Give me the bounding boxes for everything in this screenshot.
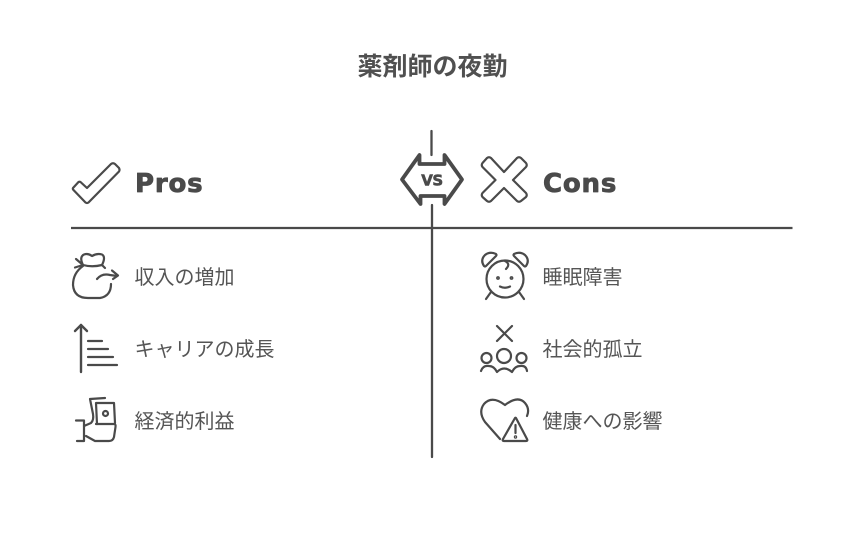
vertical divider [430,131,433,457]
label: economic benefit: 経済的利益 [134,410,234,433]
title: 薬剤師の夜勤 [357,53,508,81]
icon: money bag with arrow [73,254,118,298]
icon: heart with warning [481,399,528,441]
label: income: 収入の増加 [134,266,234,289]
label: social isolation: 社会的孤立 [542,338,642,361]
VS text: VS [421,172,443,190]
horizontal divider [71,227,792,229]
icon: hand holding money [76,398,116,441]
heading: Pros: Pros [135,169,203,199]
icon: VS badge [402,155,462,204]
icon: alarm clock face [482,253,528,299]
label: career growth: キャリアの成長 [134,338,274,361]
icon: check mark [73,163,120,203]
icon: cross mark [482,157,527,202]
heading: Cons: Cons [543,169,617,199]
icon: crossed people group [481,326,527,372]
label: health impact: 健康への影響 [542,410,662,433]
label: sleep disorder: 睡眠障害 [542,266,622,289]
icon: growth arrow and steps [75,325,117,372]
